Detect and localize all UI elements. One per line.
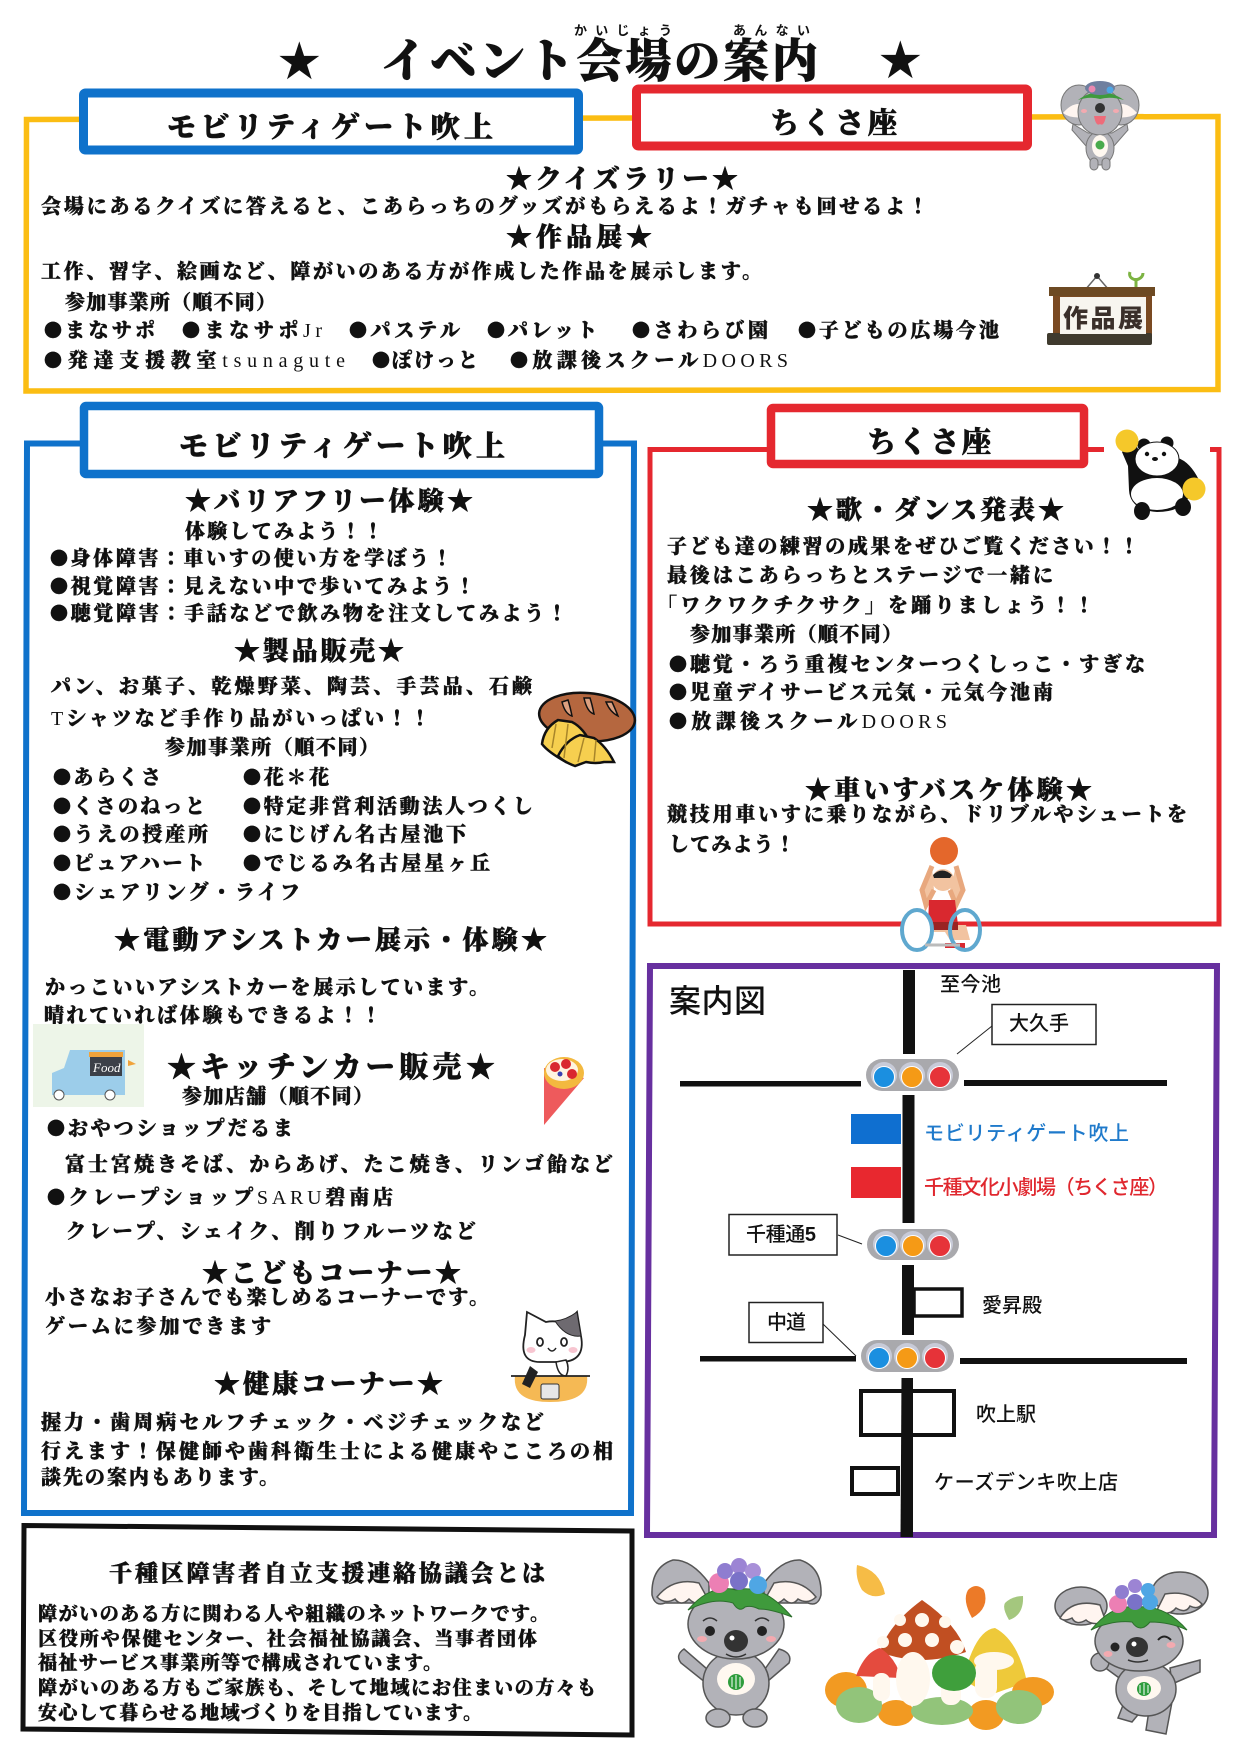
text: art exhibition: ●ぽけっと [372,347,478,373]
title: あんない [733,20,810,39]
panel: access map [647,966,1217,1537]
text: health corner: 行えます！保健師や歯科衛生士による健康やこころの相 [41,1439,613,1463]
icon: crepe [544,1057,584,1125]
text: barrier free: ★バリアフリー体験★ [185,487,473,516]
header: ちくさ座 [867,426,993,459]
icon: panda cheering [1116,430,1206,520]
icon: koala left [652,1558,821,1727]
horizontal roads [680,1080,1187,1364]
title: イベント会場の案内 [381,25,818,91]
text: product sales: ●うえの授産所 [53,821,208,847]
text: barrier free [50,487,567,626]
text: barrier free: ●視覚障害：見えない中で歩いてみよう！ [50,573,475,599]
callout: Nakamichi [749,1302,856,1356]
text: art exhibition: ★作品展★ [506,223,652,252]
header: chikusa-za: ちくさ座 [770,107,899,140]
text: health corner: 談先の案内もあります。 [41,1465,279,1489]
panel: venues overview [26,81,1218,391]
text: kids corner [45,1259,489,1338]
council text: 区役所や保健センター、社会福祉協議会、当事者団体 [38,1627,537,1650]
council text [38,1602,596,1724]
text: kids corner: ゲームに参加できます [45,1314,271,1338]
text: art exhibition: ●パレット [487,317,597,343]
text: art exhibition: 工作、習字、絵画など、障がいのある方が作成した作品を展示します。 [41,259,762,283]
header: chikusa-za [636,89,1028,146]
council heading: 千種区障害者自立支援連絡協議会とは [109,1560,545,1587]
illustration: autumn mushrooms and leaves [825,1565,1054,1730]
vertical road [900,970,915,1537]
text: quiz rally: 会場にあるクイズに答えると、こあらっちのグッズがもらえるよ！ガチャも回せるよ！ [41,194,928,218]
text: song and dance: 子ども達の練習の成果をぜひご覧ください！！ [667,534,1139,558]
label: mobility gate: モビリティゲート吹上 [924,1122,1129,1145]
text: product sales: ●ピュアハート [53,850,205,876]
icon: traffic signal Nakamichi [861,1340,954,1372]
header: mobility gate: モビリティゲート吹上 [167,111,493,144]
text: product sales [51,636,533,905]
marker: chikusa-za [851,1167,901,1198]
text: assist car: かっこいいアシストカーを展示しています。 [45,976,489,999]
text: art exhibition: ●まなサポJr [182,317,322,343]
text: kitchen car: 参加店舗（順不同） [182,1084,373,1108]
text: barrier free: ●聴覚障害：手話などで飲み物を注文してみよう！ [50,600,567,626]
icon: koala right [1055,1572,1208,1734]
text: product sales: 参加事業所（順不同） [165,735,379,759]
text: art exhibition: ●子どもの広場今池 [798,317,999,343]
text: product sales: ●でじるみ名古屋星ヶ丘 [243,850,490,876]
text: product sales: ●特定非営利活動法人つくし [243,793,533,819]
text: product sales: Tシャツなど手作り品がいっぱい！！ [51,706,430,730]
text: product sales: ●あらくさ [53,764,161,790]
text: art exhibition: ●パステル [349,317,460,343]
icon: food truck: Food [92,1060,121,1075]
text: wheelchair basketball [667,776,1187,856]
text: wheelchair basketball: ★車いすバスケ体験★ [805,776,1092,805]
text: product sales: ●花＊花 [243,764,329,790]
building: Aishoden: 愛昇殿 [982,1294,1042,1317]
text: kids corner: ★こどもコーナー★ [202,1259,461,1288]
council text: 安心して暮らせる地域づくりを目指しています。 [38,1701,482,1724]
text: kitchen car: クレープ、シェイク、削りフルーツなど [66,1220,476,1243]
text: product sales: ●くさのねっと [53,793,205,819]
title: かいじょう [574,20,672,39]
icon: bread [537,689,637,766]
icon: food truck [33,1024,144,1107]
text: song and dance: ●聴覚・ろう重複センターつくしっこ・すぎな [669,651,1145,677]
text: product sales: パン、お菓子、乾燥野菜、陶芸、手芸品、石鹸 [51,674,532,698]
text: song and dance: ●児童デイサービス元気・元気今池南 [669,679,1053,705]
text: barrier free: ●身体障害：車いすの使い方を学ぼう！ [50,545,452,571]
title [276,20,924,92]
text: product sales: ★製品販売★ [234,636,404,666]
header: mobility gate [84,93,578,150]
marker: mobility gate [851,1114,901,1144]
icon: art exhibition sign [1047,272,1155,345]
text: art exhibition: 参加事業所（順不同） [65,290,276,314]
panel: council info [23,1526,632,1735]
panel: mobility gate details [24,406,637,1513]
header [771,408,1084,464]
text: song and dance: 「ワクワクチクサク」を踊りましょう！！ [657,593,1094,617]
callout: Chikusa-dori 5: 千種通5 [746,1223,816,1246]
text: health corner [41,1369,613,1489]
text: assist car: 晴れていれば体験もできるよ！！ [44,1004,381,1027]
text: art exhibition: ● 発達支援教室 tsunagute [44,347,345,373]
building: K's Denki: ケーズデンキ吹上店 [934,1470,1118,1494]
icon: wheelchair basketball player [902,837,980,950]
council text: 障がいのある方もご家族も、そして地域にお住まいの方々も [38,1676,596,1699]
text: wheelchair basketball: 競技用車いすに乗りながら、ドリブルやシュートを [667,803,1187,826]
text: art exhibition: ●まなサポ [44,317,155,343]
text: barrier free: 体験してみよう！！ [185,520,383,543]
text: quiz rally: ★クイズラリー★ [506,165,738,194]
council text: 福祉サービス事業所等で構成されています。 [38,1651,442,1674]
text: product sales: ●にじげん名古屋池下 [243,821,468,847]
text: song and dance [657,496,1145,734]
text: art exhibition: ●放課後スクールDOORS [510,347,788,373]
icon: traffic signal Chikusa-dori [867,1229,959,1260]
text: assist car: ★電動アシストカー展示・体験★ [114,925,547,955]
map title: 案内図 [669,983,766,1019]
text: product sales: ●シェアリング・ライフ [53,879,300,905]
text: song and dance: ●放課後スクールDOORS [669,708,947,734]
text: art exhibition [41,223,999,373]
text: health corner: ★健康コーナー★ [214,1369,443,1399]
text: song and dance: 最後はこあらっちとステージで一緒に [667,564,1053,587]
text: wheelchair basketball: してみよう！ [669,833,795,856]
icon: cat at desk [511,1312,590,1402]
icon: art exhibition sign: 作品展 [1063,299,1143,335]
text: song and dance: ★歌・ダンス発表★ [807,496,1064,525]
title: ★ [877,31,924,91]
label: to Imaike: 至今池 [940,973,1001,996]
text: kitchen car: ●クレープショップSARU碧南店 [47,1184,393,1210]
building: Fukiage station: 吹上駅 [976,1403,1036,1426]
text: kitchen car: 富士宮焼きそば、からあげ、たこ焼き、リンゴ飴など [65,1152,613,1176]
callout: Okute [957,1004,1096,1054]
text: kitchen car: ★キッチンカー販売★ [167,1051,495,1084]
building: Aishoden [914,1289,1042,1317]
callout: Chikusa-dori 5 [729,1214,862,1255]
label: chikusa theater: 千種文化小劇場（ちくさ座） [924,1176,1168,1199]
council text: 障がいのある方に関わる人や組織のネットワークです。 [38,1602,549,1625]
text: kitchen car: ●おやつショップだるま [47,1115,293,1141]
text: art exhibition: ●さわらび園 [632,317,768,343]
text: kitchen car [47,1051,613,1243]
building: K's Denki [852,1468,1118,1494]
header [84,406,599,474]
text: song and dance: 参加事業所（順不同） [690,622,902,646]
callout: Okute: 大久手 [1009,1012,1069,1035]
building: Fukiage station [861,1391,1036,1435]
text: quiz rally [41,165,928,218]
header: モビリティゲート吹上 [179,430,505,463]
icon: traffic signal Okute [866,1059,959,1091]
text: kids corner: 小さなお子さんでも楽しめるコーナーです。 [45,1286,489,1309]
panel: chikusa-za details [650,408,1219,950]
text: health corner: 握力・歯周病セルフチェック・ベジチェックなど [41,1410,544,1434]
callout: Nakamichi: 中道 [767,1311,806,1334]
icon: koala cheering [1061,81,1139,170]
text: assist car [44,925,547,1027]
title: ★ [276,32,323,92]
